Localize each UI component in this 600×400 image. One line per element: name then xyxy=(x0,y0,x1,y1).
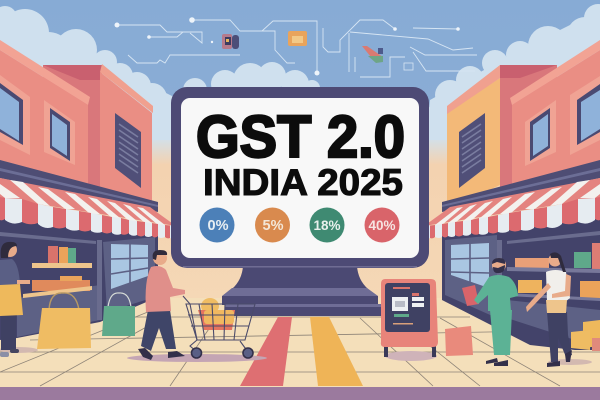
right shop lower shelf with goods xyxy=(507,280,600,301)
subtitle: INDIA 2025: INDIA 2025 xyxy=(203,162,403,203)
window: right upper xyxy=(577,84,600,145)
building: front facade xyxy=(0,40,90,190)
left shop door and window xyxy=(97,237,155,320)
left striped awning xyxy=(0,178,176,239)
building: dark fascia xyxy=(0,160,158,212)
floor stripe: red xyxy=(240,317,292,386)
rate badge: 40%: 40% xyxy=(368,218,396,233)
window: left middle xyxy=(50,108,70,161)
right shop lower panel xyxy=(507,300,600,345)
shutter: left xyxy=(115,113,141,188)
rate badge: 5% xyxy=(255,208,290,242)
right shop door and window xyxy=(445,235,502,320)
monitor bezel xyxy=(171,87,429,268)
bottom band xyxy=(0,387,600,400)
left shop front xyxy=(0,205,158,340)
rate badge: 18%: 18% xyxy=(313,218,341,233)
floor xyxy=(0,298,600,387)
right shop upper shelf with goods xyxy=(507,243,600,273)
monitor xyxy=(171,87,429,316)
building: dark fascia xyxy=(442,160,600,212)
monitor stand neck xyxy=(232,266,368,289)
right striped awning xyxy=(424,178,600,239)
awning valance xyxy=(0,197,176,239)
left shop counter with goods xyxy=(23,276,92,298)
left shop shelf with goods xyxy=(32,246,92,268)
window: left upper xyxy=(0,83,23,145)
rate badge: 40% xyxy=(364,208,400,242)
stacked boxes xyxy=(571,320,600,351)
awning slope xyxy=(0,178,176,226)
building: pink facade xyxy=(510,40,600,190)
cart wheels xyxy=(192,348,253,358)
shopping cart xyxy=(183,296,255,358)
monitor screen xyxy=(181,98,419,258)
title: GST 2.0: GST 2.0 xyxy=(196,104,405,170)
shutter: right xyxy=(459,113,485,188)
icon: sky coral shape xyxy=(362,46,383,63)
building: back block xyxy=(43,64,153,210)
monitor stand base xyxy=(222,288,382,316)
right shop front xyxy=(442,205,600,350)
person: woman on the left xyxy=(0,242,38,357)
rate badge: 18% xyxy=(310,208,344,242)
clouds xyxy=(0,4,600,150)
sky background xyxy=(0,0,600,300)
icon: sky small chip xyxy=(404,63,413,70)
left building xyxy=(0,40,158,212)
peach back wall xyxy=(0,140,600,305)
kiosk screen xyxy=(385,283,430,332)
icon: sky device xyxy=(222,34,239,49)
floor stripe: yellow xyxy=(310,317,363,386)
person: woman on the right xyxy=(526,252,592,367)
shopping bag: coral xyxy=(445,326,473,356)
cart shadow xyxy=(127,354,267,362)
person: man in green xyxy=(462,258,518,366)
cart goods xyxy=(198,298,235,330)
shopping bag: yellow xyxy=(37,293,91,349)
icon: sky parcel xyxy=(288,31,307,46)
shopping bag: green xyxy=(102,293,135,336)
rate badge: 0% xyxy=(200,208,234,242)
left shop lower panel xyxy=(17,285,100,337)
person: man with cart xyxy=(138,250,185,360)
window: right middle xyxy=(530,108,550,161)
right building xyxy=(442,40,600,212)
rate badge: 0%: 0% xyxy=(208,218,229,234)
building: yellow block xyxy=(447,65,557,210)
rate badge: 5%: 5% xyxy=(263,218,284,234)
payment kiosk xyxy=(381,279,438,361)
circuit lines in the sky xyxy=(114,17,477,77)
